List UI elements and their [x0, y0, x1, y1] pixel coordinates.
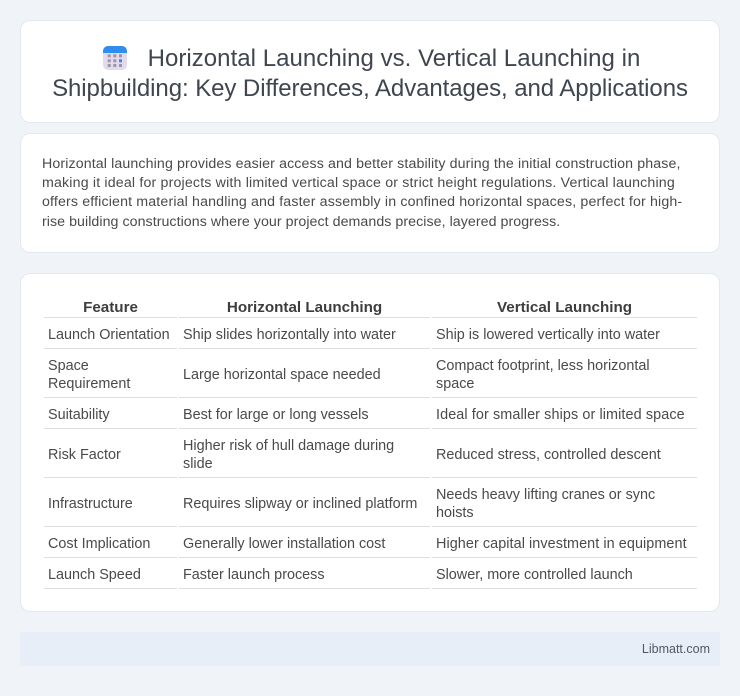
row: cost implication: Cost Implication	[48, 536, 150, 552]
footer bar	[20, 632, 720, 666]
row: risk factor: Higher risk of hull damage during	[183, 438, 394, 454]
footer credit: Libmatt.com	[642, 642, 710, 656]
table header: Horizontal Launching	[227, 299, 382, 316]
table header: Vertical Launching	[497, 299, 632, 316]
row: space requirement: Requirement	[48, 376, 130, 392]
row: launch speed: Slower, more controlled launch	[436, 567, 633, 583]
intro text: rise building constructions where your project demands precise, layered progress.	[42, 214, 560, 230]
row: risk factor: slide	[183, 456, 213, 472]
intro text: offers efficient material handling and faster assembly in confined horizontal spaces, perfect for high-	[42, 194, 682, 210]
intro text	[42, 156, 682, 230]
row: launch orientation: Ship slides horizontally into water	[183, 327, 396, 343]
intro text: making it ideal for projects with limited vertical space or strict height regulations. Vertical launching	[42, 175, 675, 191]
title: Horizontal Launching vs. Vertical Launching in	[148, 45, 640, 72]
intro text: Horizontal launching provides easier access and better stability during the initial construction phase,	[42, 156, 681, 172]
title panel	[20, 20, 720, 123]
title: Shipbuilding: Key Differences, Advantages, and Applications	[52, 75, 688, 102]
row: space requirement: Space	[48, 358, 89, 374]
row: launch orientation: Launch Orientation	[48, 327, 170, 343]
row: cost implication	[48, 536, 687, 552]
row: risk factor: Risk Factor	[48, 447, 121, 463]
table panel	[20, 273, 720, 612]
table header	[83, 299, 632, 316]
row: space requirement: Large horizontal space needed	[183, 367, 381, 383]
row: infrastructure: hoists	[436, 505, 474, 521]
row: launch speed	[48, 567, 633, 583]
intro panel	[20, 133, 720, 253]
row: infrastructure: Needs heavy lifting cranes or sync	[436, 487, 655, 503]
row: space requirement: Compact footprint, less horizontal	[436, 358, 650, 374]
row: space requirement: space	[436, 376, 474, 392]
row: infrastructure: Requires slipway or inclined platform	[183, 496, 417, 512]
row: suitability: Suitability	[48, 407, 110, 423]
title	[52, 45, 688, 102]
row: infrastructure	[48, 487, 655, 521]
table header: Feature	[83, 299, 138, 316]
row: suitability: Best for large or long vessels	[183, 407, 369, 423]
row: risk factor	[48, 438, 661, 472]
row: launch orientation	[48, 327, 660, 343]
row: suitability	[48, 407, 685, 423]
row: launch speed: Launch Speed	[48, 567, 141, 583]
row: launch speed: Faster launch process	[183, 567, 325, 583]
row: cost implication: Generally lower installation cost	[183, 536, 385, 552]
icon: calendar	[103, 46, 127, 70]
row: space requirement	[48, 358, 650, 392]
row: launch orientation: Ship is lowered vertically into water	[436, 327, 660, 343]
row: suitability: Ideal for smaller ships or limited space	[436, 407, 685, 423]
row: risk factor: Reduced stress, controlled descent	[436, 447, 661, 463]
row: cost implication: Higher capital investment in equipment	[436, 536, 687, 552]
row: infrastructure: Infrastructure	[48, 496, 133, 512]
